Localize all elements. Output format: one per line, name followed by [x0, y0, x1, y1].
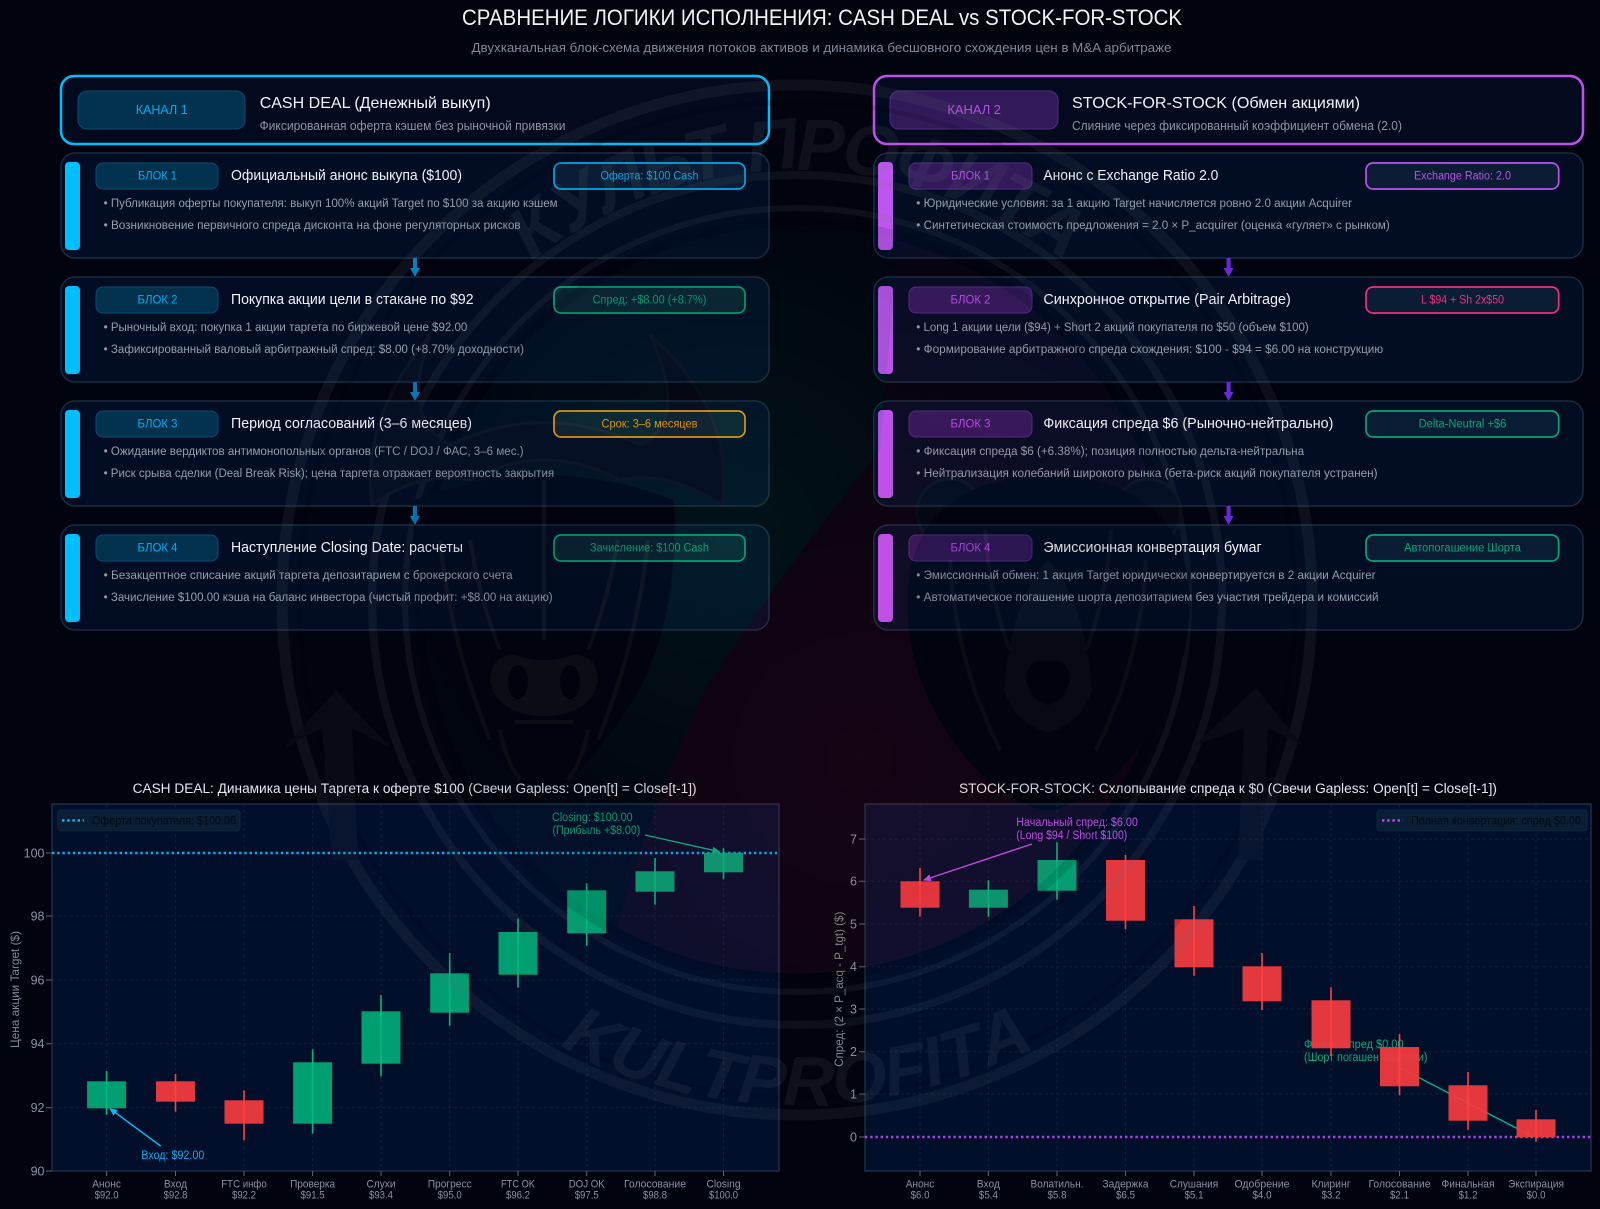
panel: channel 2 header [874, 76, 1583, 144]
x axis labels: Проверка [290, 1178, 336, 1190]
x axis labels: $96.2 [506, 1190, 530, 1202]
title: СРАВНЕНИЕ ЛОГИКИ ИСПОЛНЕНИЯ: CASH DEAL vs STOCK-FOR-STOCK [462, 5, 1182, 30]
x axis labels: $92.0 [95, 1190, 119, 1202]
x axis labels: Голосование [624, 1178, 686, 1190]
candlesticks [87, 848, 743, 1140]
y axis ticks: 100 [24, 846, 45, 860]
panel: channel 1 block 1: • Публикация оферты покупателя: выкуп 100% акций Target по $100 за акцию кэшем [104, 198, 558, 210]
panel: channel 1 block 3: • Ожидание вердиктов антимонопольных органов (FTC / DOJ / ФАС, 3–6 мес.) [104, 446, 524, 458]
legend [1377, 810, 1587, 831]
y axis ticks: 3 [850, 1002, 857, 1016]
x axis labels: $91.5 [301, 1190, 325, 1202]
panel: channel 1 block 2: БЛОК 2 [138, 292, 178, 306]
x axis labels: Вход [164, 1178, 188, 1190]
annotation: final spread: (Шорт погашен акциями) [1304, 1052, 1428, 1064]
panel: channel 2 block 1: Анонс с Exchange Ratio 2.0 [1043, 168, 1218, 184]
channel 1 subtitle: Фиксированная оферта кэшем без рыночной привязки [260, 119, 566, 133]
icon: bear head [907, 475, 1190, 810]
y axis ticks: 1 [850, 1088, 857, 1102]
icon: right arrow [1195, 688, 1302, 860]
annotation: final spread: Финал: спред $0.00 [1304, 1039, 1404, 1051]
x axis labels [906, 1178, 1564, 1202]
x axis labels: Вход [977, 1178, 1000, 1190]
legend [58, 810, 240, 831]
y axis ticks: 6 [850, 874, 857, 888]
x axis labels: Волатильн. [1030, 1178, 1084, 1190]
x axis labels: Слушания [1170, 1178, 1218, 1190]
panel: channel 2 block 1 [874, 153, 1583, 258]
panel: channel 2 block 4: Автопогашение Шорта [1404, 542, 1521, 554]
panel: channel 1 block 1 [61, 153, 769, 258]
panel: channel 1 block 1: Официальный анонс выкупа ($100) [231, 168, 462, 184]
arrow: block 2 to 3 [1224, 382, 1234, 401]
y axis ticks: 2 [850, 1045, 857, 1059]
x axis labels: FTC инфо [221, 1178, 267, 1190]
x axis labels: $92.2 [232, 1190, 256, 1202]
arrow: block 1 to 2 [1224, 258, 1234, 277]
panel: channel 1 block 2 [61, 277, 769, 382]
panel: channel 2 block 2: Синхронное открытие (Pair Arbitrage) [1043, 292, 1291, 308]
y axis ticks: 94 [31, 1037, 45, 1051]
panel: channel 2 block 3: Delta-Neutral +$6 [1419, 418, 1506, 430]
panel: channel 2 block 1: • Синтетическая стоимость предложения = 2.0 × P_acquirer (оценка «гуляет» с рынком) [916, 220, 1390, 232]
x axis labels: $95.0 [438, 1190, 462, 1202]
panel: channel 1 block 4: БЛОК 4 [138, 540, 178, 554]
panel: channel 1 block 4: Наступление Closing Date: расчеты [231, 540, 463, 556]
channel 2 pill: КАНАЛ 2 [947, 102, 1001, 117]
panel: channel 2 block 2 [874, 277, 1583, 382]
panel: channel 1 block 3: Период согласований (3–6 месяцев) [231, 416, 472, 432]
y axis label: Цена акции Target ($) [8, 931, 22, 1048]
y axis ticks [24, 846, 45, 1178]
panel: channel 1 block 1: БЛОК 1 [138, 168, 177, 182]
panel: channel 1 block 3 [61, 401, 769, 506]
x axis labels: $5.1 [1184, 1190, 1204, 1202]
panel: channel 2 block 4 [874, 525, 1583, 630]
y axis ticks: 96 [31, 974, 45, 988]
x axis labels: Анонс [906, 1178, 935, 1190]
panel: channel 2 block 4: Эмиссионная конвертация бумаг [1043, 540, 1262, 556]
panel: channel 2 block 3 [874, 401, 1583, 506]
panel: channel 2 block 3: БЛОК 3 [950, 416, 991, 430]
panel: channel 2 block 2: • Формирование арбитражного спреда схождения: $100 - $94 = $6.00 на конструкцию [916, 344, 1384, 356]
annotation: closing: Closing: $100.00 [552, 812, 633, 824]
panel: channel 2 block 2: L $94 + Sh 2x$50 [1421, 294, 1504, 306]
x axis labels: $1.2 [1458, 1190, 1478, 1202]
panel: channel 1 block 1: Оферта: $100 Cash [600, 170, 698, 182]
x axis labels: DOJ OK [569, 1178, 605, 1190]
panel: channel 1 block 2: • Рыночный вход: покупка 1 акции таргета по биржевой цене $92.00 [104, 322, 467, 334]
x axis labels: Клиринг [1312, 1178, 1350, 1190]
y axis ticks: 98 [31, 910, 45, 924]
x axis labels: $5.4 [979, 1190, 998, 1202]
x axis labels: $97.5 [575, 1190, 599, 1202]
panel: channel 2 block 1: БЛОК 1 [951, 168, 990, 182]
panel: channel 1 header [61, 76, 769, 144]
channel 1 pill [78, 91, 245, 129]
channel 1 title: CASH DEAL (Денежный выкуп) [260, 95, 491, 112]
annotation: initial spread: (Long $94 / Short $100) [1016, 830, 1127, 842]
x axis labels: $6.5 [1116, 1190, 1135, 1202]
panel: channel 2 block 2: БЛОК 2 [950, 292, 991, 306]
x axis labels: $0.0 [1526, 1190, 1546, 1202]
annotation: final spread [1304, 1039, 1533, 1137]
ring text bottom: KULTPROFITA [553, 990, 1041, 1122]
x axis labels: Одобрение [1234, 1178, 1290, 1190]
y axis ticks: 92 [31, 1101, 45, 1115]
panel: channel 1 block 4: • Безакцептное списание акций таргета депозитарием с брокерского счета [104, 570, 513, 582]
subtitle: Двухканальная блок-схема движения потоков активов и динамика бесшовного схождения цен в M&A арбитраже [472, 40, 1172, 55]
panel: channel 1 block 2: Покупка акции цели в стакане по $92 [231, 292, 474, 308]
x axis labels: FTC OK [501, 1178, 536, 1190]
x axis labels: $100.0 [709, 1190, 738, 1202]
channel 2 subtitle: Слияние через фиксированный коэффициент обмена (2.0) [1072, 119, 1402, 133]
x axis labels: Closing [706, 1178, 740, 1190]
y axis ticks: 7 [850, 832, 857, 846]
channel 1 pill: КАНАЛ 1 [136, 102, 188, 117]
arrow: block 3 to 4 [1224, 506, 1234, 525]
annotation: initial spread: Начальный спред: $6.00 [1016, 817, 1138, 829]
panel: channel 2 block 1: Exchange Ratio: 2.0 [1414, 170, 1511, 182]
icon: left arrow [284, 690, 391, 860]
panel: channel 1 block 4: Зачисление: $100 Cash [590, 542, 709, 554]
panel: channel 1 block 3: • Риск срыва сделки (Deal Break Risk); цена таргета отражает вероятность закрытия [104, 468, 554, 480]
x axis labels: Анонс [92, 1178, 121, 1190]
channel 2 title: STOCK-FOR-STOCK (Обмен акциями) [1072, 95, 1360, 112]
y axis ticks: 5 [850, 918, 857, 932]
panel: channel 2 block 3: Фиксация спреда $6 (Рыночно-нейтрально) [1043, 416, 1333, 432]
x axis labels: Экспирация [1508, 1178, 1564, 1190]
chart title: STOCK-FOR-STOCK: Схлопывание спреда к $0 (Свечи Gapless: Open[t] = Close[t-1]) [959, 781, 1497, 796]
x axis labels: Финальная [1442, 1178, 1495, 1190]
legend: Полная конвертация: спред $0.00 [1411, 814, 1581, 828]
panel: channel 2 block 3: • Нейтрализация колебаний широкого рынка (бета-риск акций покупателя устранен) [916, 468, 1378, 480]
x axis labels: $5.8 [1048, 1190, 1066, 1202]
panel: channel 2 block 4: • Автоматическое погашение шорта депозитарием без участия трейдера и комиссий [916, 592, 1379, 604]
panel: channel 1 block 4 [61, 525, 769, 630]
annotation: entry: Вход: $92.00 [141, 1150, 204, 1162]
panel: channel 1 block 3: БЛОК 3 [138, 416, 178, 430]
y axis label: Спред: (2 × P_acq - P_tgt) ($) [832, 912, 846, 1067]
x axis labels: $93.4 [369, 1190, 393, 1202]
x axis labels: $2.1 [1390, 1190, 1409, 1202]
ring text top: КУЛЬТ ПРОФИТА [493, 103, 1100, 275]
y axis ticks: 4 [850, 960, 857, 974]
panel: channel 1 block 4: • Зачисление $100.00 кэша на баланс инвестора (чистый профит: +$8.00 на акцию) [104, 592, 553, 604]
legend: Оферта покупателя: $100.00 [92, 814, 236, 828]
x axis labels: $92.8 [164, 1190, 188, 1202]
x axis labels [92, 1178, 741, 1202]
watermark logo overlay [282, 85, 1312, 1122]
y axis ticks [850, 832, 857, 1144]
x axis labels: Слухи [366, 1178, 396, 1190]
icon: bull head [370, 335, 724, 795]
x axis labels: $98.8 [643, 1190, 667, 1202]
x axis labels: $6.0 [910, 1190, 930, 1202]
chart: cash deal candles [8, 781, 779, 1202]
chart title: CASH DEAL: Динамика цены Таргета к оферте $100 (Свечи Gapless: Open[t] = Close[t-1]) [133, 781, 697, 796]
panel: channel 1 block 2: • Зафиксированный валовый арбитражный спред: $8.00 (+8.70% доходности) [104, 344, 524, 356]
y axis ticks: 90 [31, 1164, 45, 1178]
channel 2 pill [890, 91, 1058, 129]
panel: channel 2 block 3: • Фиксация спреда $6 (+6.38%); позиция полностью дельта-нейтральна [916, 446, 1305, 458]
x axis labels: $3.2 [1322, 1190, 1340, 1202]
arrow: block 3 to 4 [410, 506, 420, 525]
panel: channel 1 block 2: Спред: +$8.00 (+8.7%) [593, 294, 707, 306]
x axis labels: Задержка [1102, 1178, 1149, 1190]
candlesticks [900, 842, 1556, 1142]
chart: stock-for-stock candles [832, 781, 1591, 1202]
annotation: closing: (Прибыль +$8.00) [552, 825, 640, 837]
arrow: block 2 to 3 [410, 382, 420, 401]
x axis labels: $4.0 [1252, 1190, 1272, 1202]
panel: channel 2 block 4: • Эмиссионный обмен: 1 акция Target юридически конвертируется в 2 акции Acquirer [916, 570, 1376, 582]
x axis labels: Прогресс [428, 1178, 472, 1190]
annotation: entry [110, 1109, 204, 1162]
annotation: closing [552, 812, 719, 852]
arrow: block 1 to 2 [410, 258, 420, 277]
y axis ticks: 0 [850, 1130, 857, 1144]
panel: channel 1 block 1: • Возникновение первичного спреда дисконта на фоне регуляторных рисков [104, 220, 521, 232]
panel: channel 2 block 2: • Long 1 акции цели ($94) + Short 2 акций покупателя по $50 (объем $100) [916, 322, 1309, 334]
annotation: initial spread [924, 817, 1138, 880]
panel: channel 2 block 1: • Юридические условия: за 1 акцию Target начисляется ровно 2.0 акции Acquirer [916, 198, 1352, 210]
panel: channel 1 block 3: Срок: 3–6 месяцев [602, 418, 698, 430]
panel: channel 2 block 4: БЛОК 4 [950, 540, 991, 554]
x axis labels: Голосование [1368, 1178, 1430, 1190]
